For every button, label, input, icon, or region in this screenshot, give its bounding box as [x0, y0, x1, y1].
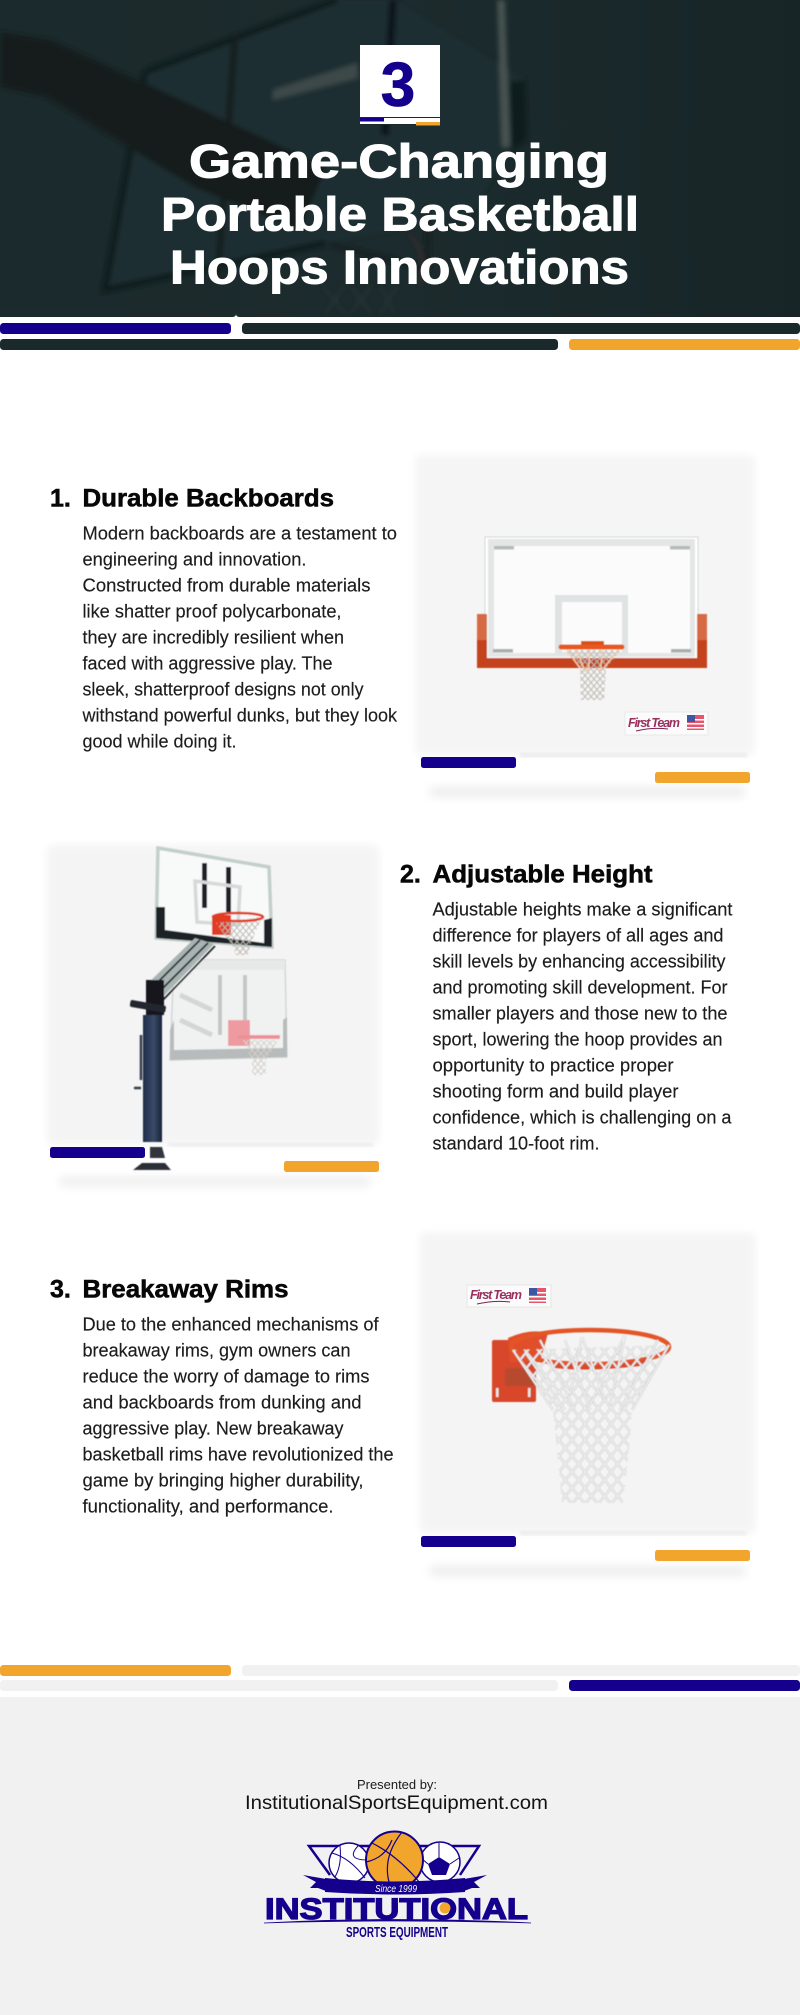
image: glass backboard [477, 537, 707, 700]
panel: backboard image card [415, 455, 755, 796]
body text 3: functionality, and performance. [82, 1496, 334, 1516]
logo: First Team [467, 1285, 551, 1307]
title: Portable Basketball [161, 188, 639, 240]
body text 2: smaller players and those new to the [432, 1004, 728, 1024]
body text 1: Constructed from durable materials [82, 576, 370, 596]
title: Game-Changing [189, 134, 609, 188]
heading 3: 3. [50, 1276, 71, 1304]
body text 3: aggressive play. New breakaway [82, 1418, 344, 1438]
basketball [366, 1832, 423, 1888]
volleyball [329, 1843, 369, 1883]
body text 1: engineering and innovation. [82, 550, 306, 570]
title [161, 134, 639, 294]
pole and base [143, 1015, 162, 1142]
section 3: breakaway rims text [50, 1276, 394, 1516]
body text 3: game by bringing higher durability, [82, 1470, 364, 1490]
body text 1: withstand powerful dunks, but they look [81, 706, 398, 726]
upper board [156, 848, 272, 947]
body text 2: and promoting skill development. For [432, 978, 728, 998]
rim and net [212, 915, 231, 935]
header: dark photo banner [0, 0, 800, 317]
heading 1: Durable Backboards [82, 484, 334, 512]
body text 2 [432, 900, 732, 1154]
body text 2: Adjustable heights make a significant [432, 900, 732, 920]
footer panel [0, 1697, 800, 2015]
top divider bars [0, 314, 800, 357]
icon: number 3 tile: 3 [381, 51, 415, 120]
ghost lower board [170, 960, 287, 1075]
body text 3: Due to the enhanced mechanisms of [82, 1314, 379, 1334]
body text 3: basketball rims have revolutionized the [82, 1444, 394, 1464]
body text 1: good while doing it. [82, 732, 236, 752]
logo: Institutional Sports Equipment [264, 1832, 531, 1941]
body text 2: standard 10-foot rim. [432, 1134, 600, 1154]
body text 1: faced with aggressive play. The [82, 654, 332, 674]
title: Hoops Innovations [170, 240, 629, 294]
logo: First Team [625, 712, 708, 735]
body text 1: sleek, shatterproof designs not only [82, 680, 364, 700]
body text 3: breakaway rims, gym owners can [82, 1340, 350, 1360]
section 1: durable backboards text [50, 484, 398, 752]
body text 2: skill levels by enhancing accessibility [432, 952, 726, 972]
body text 2: difference for players of all ages and [432, 926, 724, 946]
body text 1 [81, 524, 398, 752]
body text 1: they are incredibly resilient when [82, 628, 344, 648]
body text 3: reduce the worry of damage to rims [82, 1366, 370, 1386]
card shadow and bars [50, 1143, 379, 1185]
heading 1: 1. [50, 484, 71, 512]
logo: Institutional Sports Equipment: INSTITUTIONAL [265, 1893, 528, 1926]
heading 3: Breakaway Rims [82, 1276, 288, 1304]
panel: adjustable hoop image card [47, 845, 379, 1185]
body text 1: Modern backboards are a testament to [82, 524, 397, 544]
logo: First Team: First Team [628, 716, 680, 730]
card shadow and bars [421, 1531, 750, 1575]
backboard photo [0, 0, 527, 314]
body text 1: like shatter proof polycarbonate, [82, 602, 342, 622]
soccer ball [420, 1842, 460, 1882]
ribbon: Since 1999 [375, 1883, 417, 1895]
image: breakaway rim and net [492, 1330, 669, 1503]
image: adjustable hoop [130, 848, 287, 1170]
body text 3 [82, 1314, 394, 1516]
ribbon [303, 1875, 487, 1895]
body text 2: shooting form and build player [432, 1082, 678, 1102]
arms [146, 938, 214, 1000]
body text 2: opportunity to practice proper [432, 1056, 674, 1076]
logo: Institutional Sports Equipment: SPORTS EQUIPMENT [346, 1924, 448, 1941]
body text 2: sport, lowering the hoop provides an [432, 1030, 722, 1050]
body text 3: and backboards from dunking and [82, 1392, 362, 1412]
presented by text: InstitutionalSportsEquipment.com [245, 1792, 548, 1814]
section 2: adjustable height text [400, 860, 732, 1154]
panel: breakaway rim image card [420, 1233, 755, 1575]
icon: number 3 tile [360, 45, 440, 126]
logo: First Team: First Team [470, 1288, 522, 1302]
heading 2: 2. [400, 860, 421, 888]
presented by text: Presented by: [357, 1777, 437, 1792]
presented by text [245, 1777, 548, 1814]
footer divider bars [0, 1665, 800, 1691]
body text 2: confidence, which is challenging on a [432, 1108, 732, 1128]
card shadow and bars [421, 753, 750, 796]
heading 2: Adjustable Height [432, 860, 653, 888]
